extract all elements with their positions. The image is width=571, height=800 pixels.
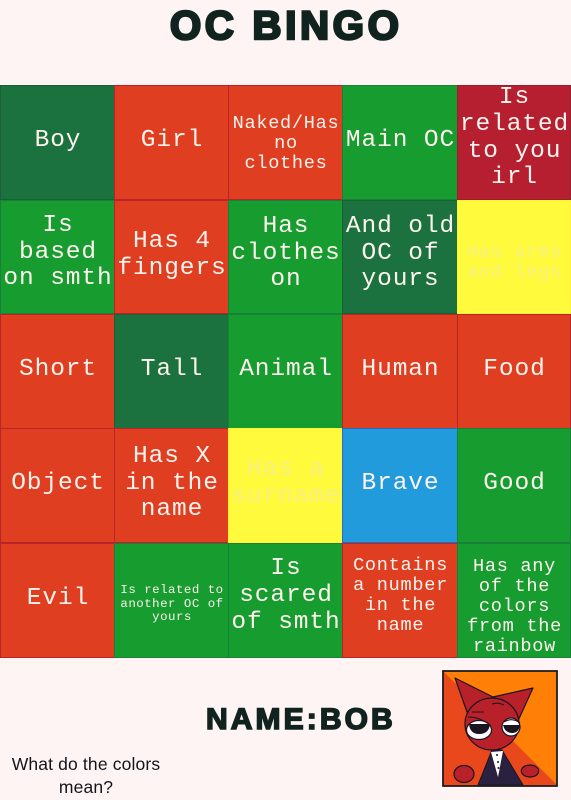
cell: Object [0,428,115,543]
question text: What do the colors [12,754,160,774]
cell: And old OC of yours [342,200,458,314]
cell: Has a surname [228,428,343,543]
cell: Evil: Evil [27,585,89,612]
cell: Is based on smth [0,200,115,314]
cell: Brave: Brave [361,470,440,497]
icon: character portrait [442,670,558,787]
cell: Brave [342,428,458,543]
cell: Has a surname: Has a surname [231,456,341,510]
cell: Main OC [342,85,458,200]
bingo grid [0,84,571,658]
cell: Short [0,314,115,429]
cell: Good: Good [483,470,546,497]
cell: Is related to another OC: Is related to another OC of yours [120,583,224,624]
cell: Contains a number in the name: Contains a number in the name [353,554,448,636]
cell: Food: Food [483,356,546,383]
cell: Has clothes on [228,200,343,314]
cell: Has X in the name [114,428,229,543]
cell: Good [457,428,571,543]
cell: Naked: Naked/Has no clothes [233,112,339,174]
cell: Evil [0,543,115,658]
cell: Is based on smth: Is based on smth [3,212,113,292]
cell: Contains a number in the name [342,543,458,658]
cell: Has 4 fingers [114,200,229,314]
cell: Has arms and legs [457,200,571,314]
cell: Has any of the colors from the rainbow: Has any of the colors from the rainbow [467,556,562,656]
cell: Is related to another OC [114,543,229,658]
cell: Has clothes on: Has clothes on [231,213,341,293]
cell: Has arms and legs: Has arms and legs [467,242,562,283]
cell: Has 4 fingers: Has 4 fingers [117,228,227,282]
cell: Girl: Girl [141,127,203,154]
cell: Human [342,314,458,429]
cell: Tall [114,314,229,429]
cell: Main OC: Main OC [346,127,455,154]
title: OC BINGO [170,4,403,48]
cell: Is related to you irl: Is related to you irl [460,84,569,191]
cell: Animal: Animal [239,356,333,383]
cell: Tall: Tall [141,356,203,383]
cell: Boy: Boy [35,127,81,154]
cell: Boy [0,85,115,200]
cell: Is scared of smth [228,543,343,658]
cell: Is scared of smth: Is scared of smth [231,555,341,636]
cell: And old OC of yours: And old OC of yours [346,213,455,293]
cell: Has X in the name: Has X in the name [125,443,219,523]
cell: Naked [228,85,343,200]
cell: Human: Human [361,356,440,383]
question text: mean? [59,777,113,797]
cell: Object: Object [11,470,105,497]
name label: NAME:BOB [206,703,396,736]
cell: Short: Short [19,356,97,383]
question text [12,754,160,797]
cell: Animal [228,314,343,429]
cell: Food [457,314,571,429]
cell: Girl [114,85,229,200]
